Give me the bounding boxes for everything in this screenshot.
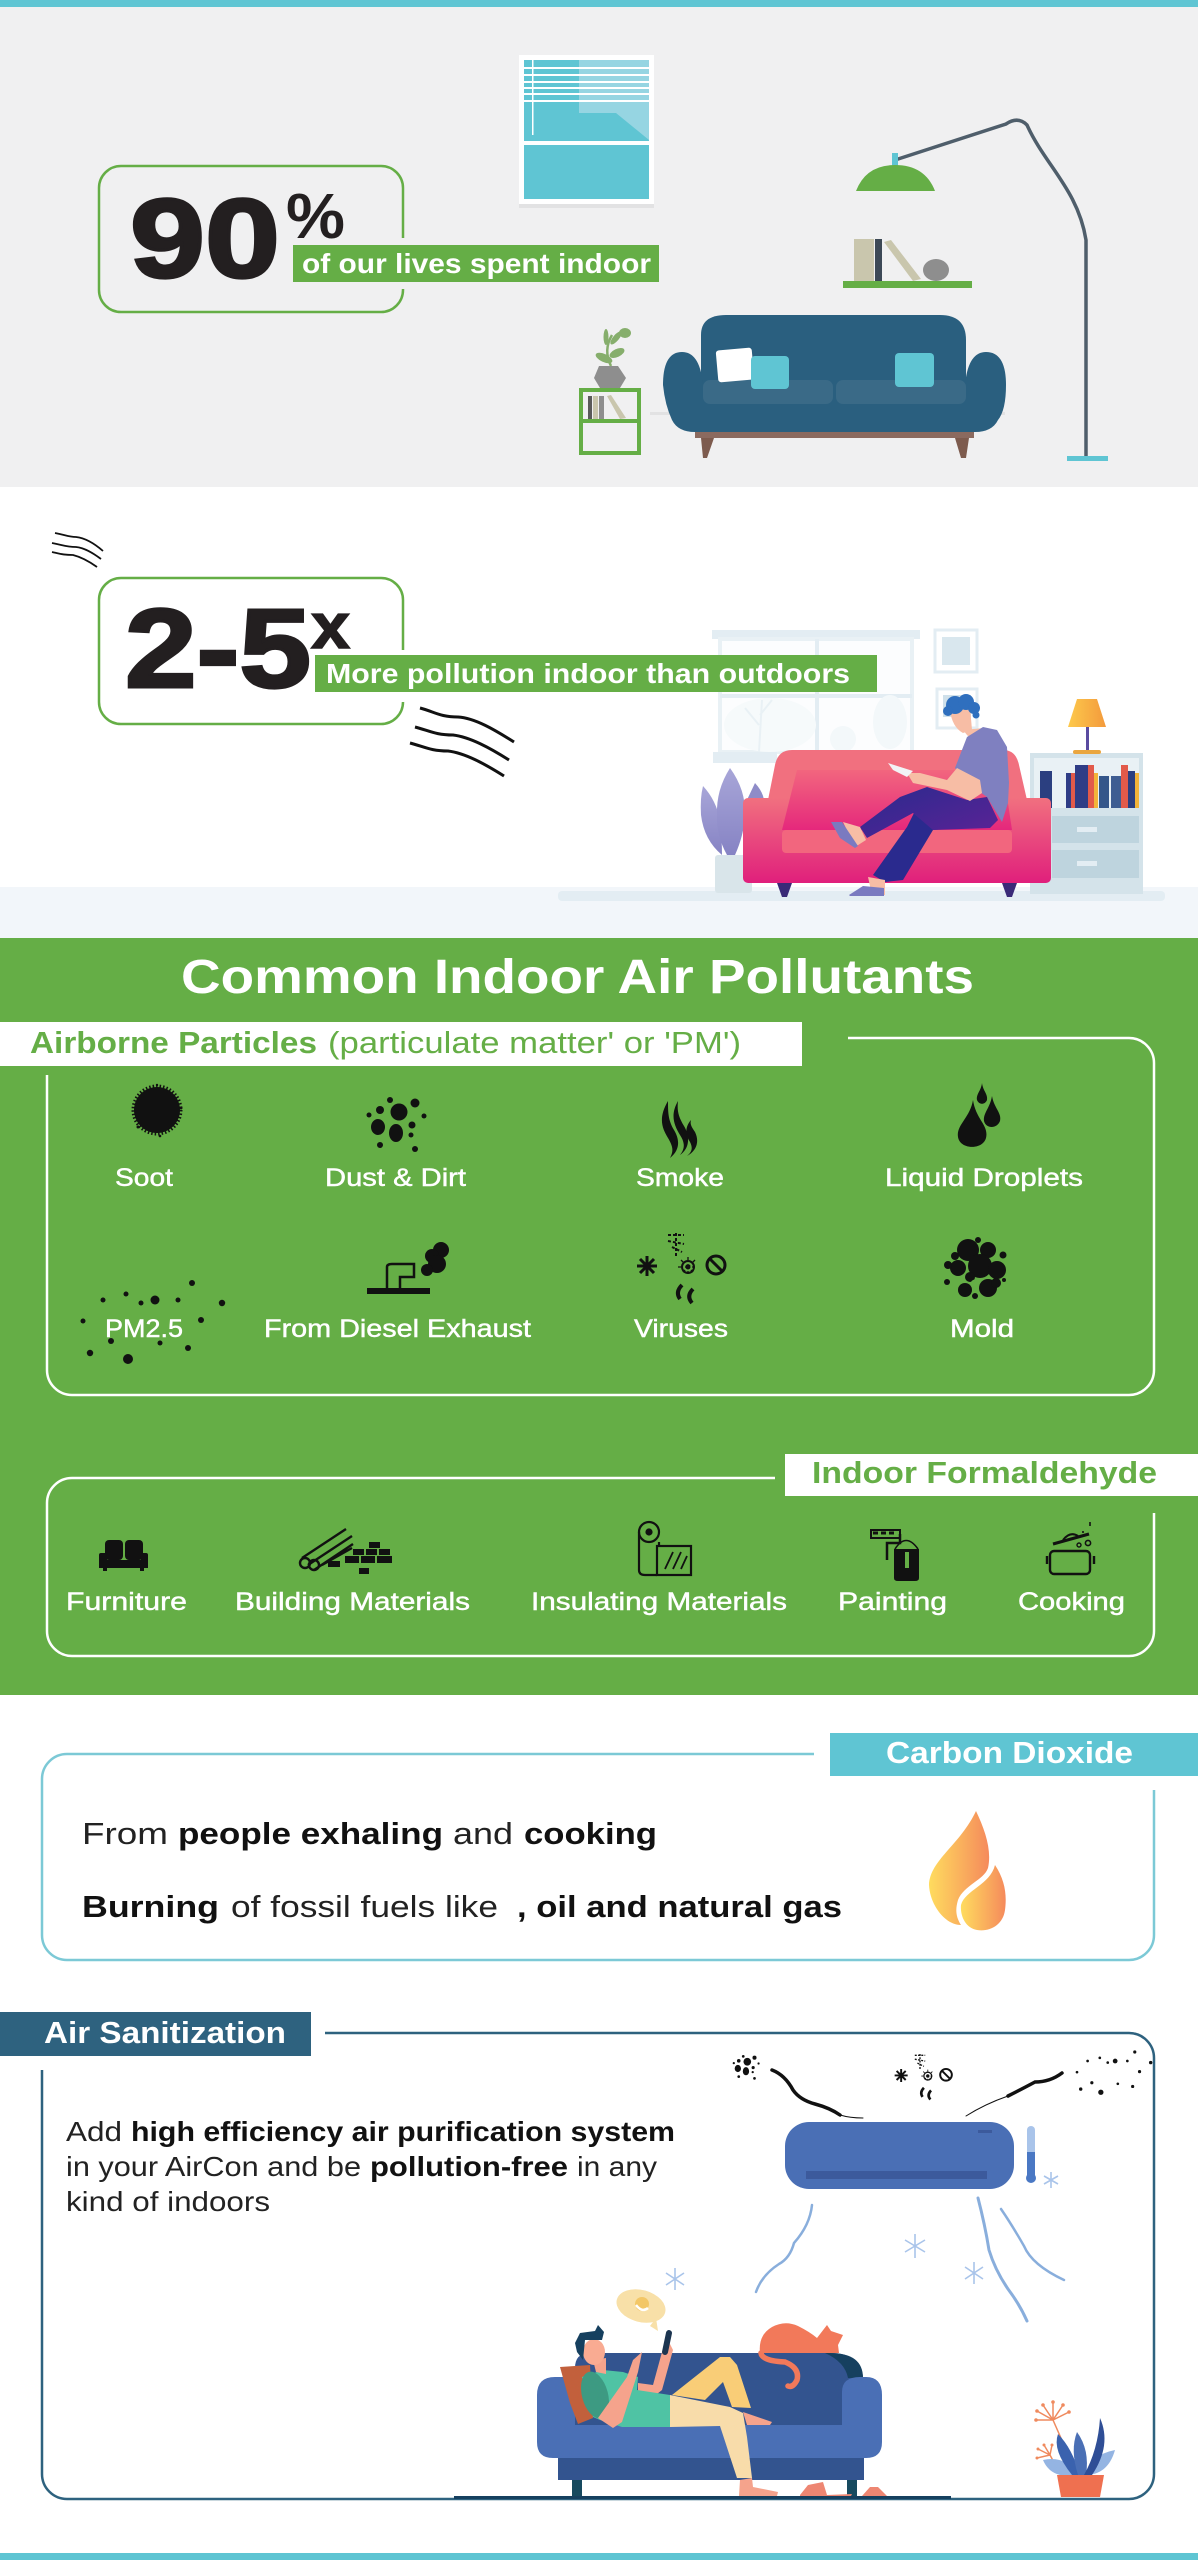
caption banner: More pollution indoor than outdoors — [326, 658, 850, 689]
label: soot: Soot — [115, 1164, 173, 1192]
icon: diesel exhaust — [367, 1242, 449, 1294]
heading: indoor formaldehyde — [785, 1454, 1198, 1496]
text: add purification system: kind of indoors — [66, 2186, 270, 2217]
purple plant — [701, 768, 764, 893]
title: Common Indoor Air Pollutants — [181, 951, 974, 1004]
label: smoke: Smoke — [636, 1164, 724, 1192]
heading: indoor formaldehyde: Indoor Formaldehyde — [812, 1455, 1157, 1490]
icon: mold — [944, 1237, 1006, 1299]
text: burning fossil fuels: , oil and natural gas — [517, 1889, 842, 1924]
window illustration — [519, 55, 654, 208]
text: add purification system — [66, 2116, 675, 2217]
icon: smoke — [662, 1101, 697, 1158]
heading: airborne particles: (particulate matter' or 'PM') — [328, 1025, 741, 1060]
text: add purification system: high efficiency air purification system — [131, 2116, 675, 2147]
small wave lines — [52, 533, 103, 567]
stat: 90%: 90 — [130, 176, 280, 301]
text: burning fossil fuels — [82, 1889, 842, 1924]
wall shelf with books — [843, 239, 972, 288]
stat: 2-5x: 2-5 — [125, 586, 311, 711]
text: add purification system: Add — [66, 2116, 122, 2147]
stat: 2-5x: x — [311, 590, 350, 662]
icon: small dust — [733, 2055, 760, 2080]
icon: building materials — [300, 1529, 392, 1574]
text: from people exhaling — [82, 1816, 657, 1851]
person reading — [831, 694, 1009, 896]
icon: liquid droplets — [958, 1083, 1000, 1147]
blue couch — [537, 2353, 882, 2496]
text: add purification system: in any — [577, 2151, 657, 2182]
heading: air sanitization — [0, 2012, 311, 2056]
large wave lines — [410, 708, 514, 776]
label: building materials: Building Materials — [235, 1588, 470, 1616]
floor band — [0, 887, 1198, 938]
air conditioner — [785, 2122, 1014, 2189]
stat outline box — [99, 578, 403, 724]
text: from people exhaling: From — [82, 1816, 168, 1851]
floor line — [454, 2496, 951, 2499]
stat outline box — [99, 166, 403, 312]
carbon dioxide outline — [42, 1754, 1154, 1960]
heading: carbon dioxide — [830, 1733, 1198, 1776]
label: mold: Mold — [950, 1315, 1014, 1343]
icon: dust and dirt — [366, 1097, 426, 1152]
caption banner: of our lives spent indoor — [302, 248, 651, 279]
icon: small pm dots — [1076, 2050, 1152, 2095]
floor lamp — [856, 120, 1108, 461]
panel: 90 percent indoor — [0, 7, 1198, 487]
label: liquid droplets: Liquid Droplets — [885, 1164, 1083, 1192]
label: insulating materials: Insulating Materials — [531, 1588, 787, 1616]
stat: 90% — [130, 176, 345, 301]
text: add purification system: in your AirCon and be — [66, 2151, 361, 2182]
icon: flame — [929, 1811, 1006, 1930]
label: dust and dirt: Dust & Dirt — [325, 1164, 466, 1192]
label: painting: Painting — [838, 1588, 947, 1616]
text: burning fossil fuels: Burning — [82, 1889, 219, 1924]
icon: painting — [871, 1530, 919, 1581]
text: burning fossil fuels: of fossil fuels like — [231, 1889, 498, 1924]
side table with plant — [581, 328, 639, 453]
text: from people exhaling: people exhaling — [178, 1816, 443, 1851]
rug — [558, 891, 1165, 901]
airborne particles outline — [47, 1038, 1154, 1395]
icon: furniture — [99, 1540, 148, 1571]
icon: viruses — [637, 1233, 725, 1303]
cat — [760, 2323, 843, 2386]
table lamp — [1068, 699, 1106, 754]
room window — [712, 630, 920, 763]
text: from people exhaling: and — [453, 1816, 513, 1851]
label: viruses: Viruses — [634, 1315, 728, 1343]
icon: pm2.5 dots — [80, 1280, 225, 1364]
text: from people exhaling: cooking — [524, 1816, 657, 1851]
label: from diesel exhaust: From Diesel Exhaust — [264, 1315, 531, 1343]
bottom accent bar — [0, 2553, 1198, 2560]
icon: soot — [133, 1084, 182, 1137]
icon: small virus — [895, 2054, 952, 2100]
heading: carbon dioxide: Carbon Dioxide — [886, 1735, 1133, 1770]
panel: air sanitization — [0, 2012, 1154, 2499]
cool air streams — [756, 2198, 1064, 2321]
person lying on couch — [560, 2325, 778, 2496]
polluted air streams — [772, 2070, 1062, 2118]
book shelf — [1030, 753, 1143, 894]
panel: carbon dioxide — [42, 1733, 1198, 1960]
snowflakes — [666, 2172, 1058, 2290]
air sanitization outline — [42, 2033, 1154, 2499]
thermometer — [1026, 2126, 1036, 2183]
icon: insulating materials — [639, 1522, 691, 1575]
icon: cooking — [1047, 1522, 1094, 1574]
panel: 2-5x pollution — [0, 487, 1198, 938]
stat: 90%: % — [286, 180, 345, 252]
heading: air sanitization: Air Sanitization — [44, 2015, 286, 2050]
speech bubble — [613, 2284, 669, 2331]
slippers — [800, 2482, 887, 2496]
panel: common indoor air pollutants — [0, 938, 1198, 1695]
top accent bar — [0, 0, 1198, 7]
formaldehyde outline — [47, 1478, 1154, 1656]
text: add purification system: pollution-free — [370, 2151, 568, 2182]
label: cooking: Cooking — [1018, 1588, 1125, 1616]
potted plant — [1034, 2400, 1115, 2497]
blue sofa — [650, 315, 1006, 458]
pink sofa — [743, 750, 1051, 897]
label: furniture: Furniture — [66, 1588, 187, 1616]
heading: airborne particles — [0, 1022, 802, 1066]
heading: airborne particles: Airborne Particles — [30, 1025, 317, 1060]
label: pm2.5: PM2.5 — [105, 1315, 183, 1343]
wall pictures — [935, 630, 977, 728]
